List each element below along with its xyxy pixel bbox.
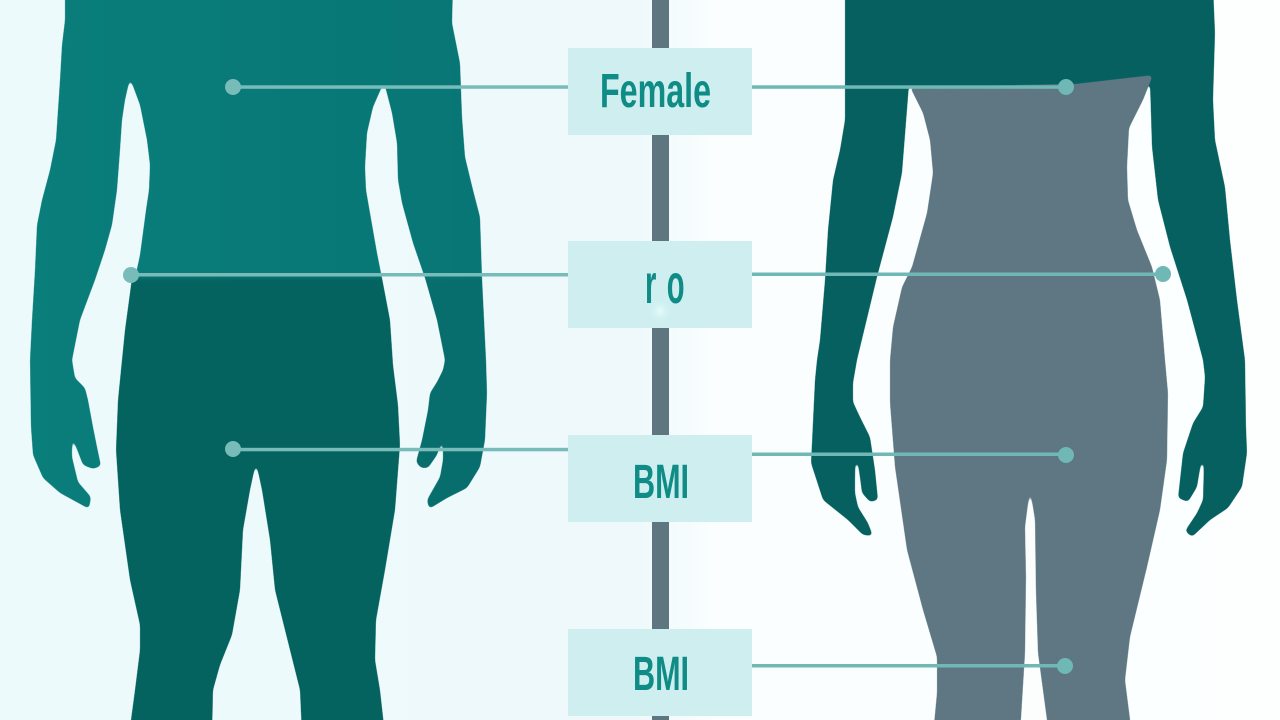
label: ro: ro: [645, 254, 695, 316]
connector: row 4 right: [751, 658, 1073, 674]
label: ro: [568, 241, 752, 328]
right body dark: shoulders and arms: [811, 0, 1247, 537]
connector: female left: [225, 79, 569, 95]
center divider line: [652, 0, 669, 720]
left silhouette: [30, 0, 487, 720]
left figure right forearm and hand: [416, 278, 487, 509]
label: BMI row 3: BMI: [633, 456, 689, 509]
label: Female: [568, 48, 752, 135]
label: Female: Female: [600, 65, 711, 118]
right silhouette: [811, 0, 1247, 720]
label: BMI row 4: BMI: [633, 648, 689, 701]
connector: row 2 left: [123, 267, 569, 283]
label: BMI row 4: [568, 629, 752, 716]
left body lower: hips and legs: [116, 278, 400, 720]
connector: female right: [751, 79, 1074, 95]
connector: row 3 right: [751, 447, 1074, 463]
connector: row 2 right: [751, 266, 1171, 282]
left body upper: torso and arms: [30, 0, 482, 509]
label: BMI row 3: [568, 435, 752, 522]
right body grey: torso and legs: [890, 75, 1168, 720]
connector: row 3 left: [225, 441, 569, 457]
